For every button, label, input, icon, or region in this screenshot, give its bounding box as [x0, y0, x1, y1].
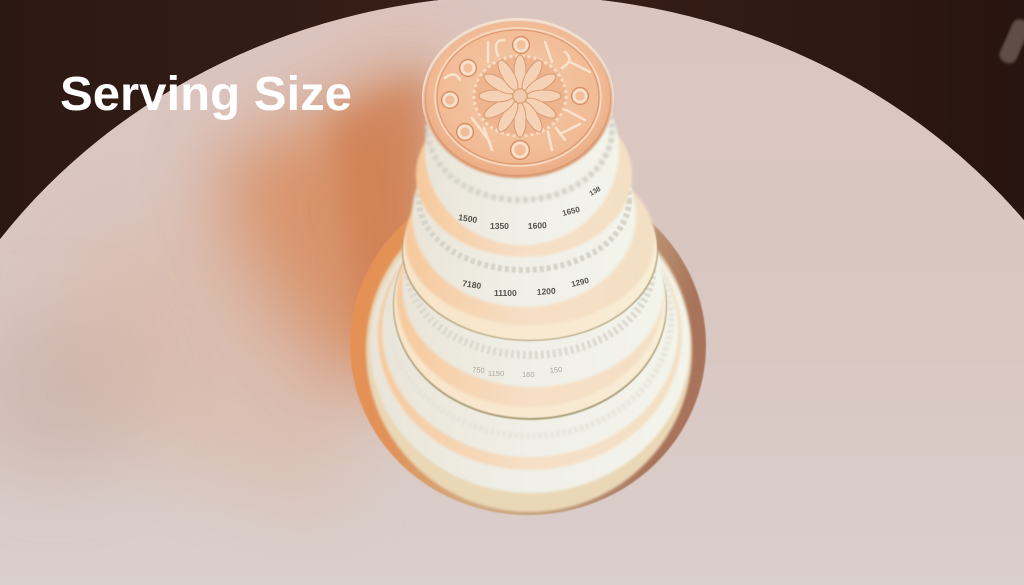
cake plate	[350, 175, 706, 515]
cake year labels: 750	[472, 365, 485, 375]
cake year labels: 11100	[494, 288, 517, 298]
cake year labels: 160	[522, 370, 535, 379]
cake year labels: 138	[588, 186, 602, 198]
cake	[350, 18, 706, 515]
cake year labels: 1150	[488, 369, 504, 378]
scroll ring	[444, 39, 590, 157]
table shadow	[74, 212, 353, 510]
cake year labels: 1650	[561, 205, 581, 218]
cake year labels: 7180	[462, 278, 482, 291]
cake year labels: 1290	[570, 276, 590, 289]
cake year labels: 150	[549, 365, 563, 375]
cake year labels: 1500	[458, 212, 478, 225]
title: Serving Size	[60, 68, 352, 121]
tier 5	[366, 188, 692, 512]
cake year labels: 1600	[528, 220, 547, 231]
tier 2	[416, 55, 632, 257]
cake year labels: 1200	[536, 286, 556, 297]
embossed medallion top	[422, 18, 614, 178]
rosette petals	[479, 55, 561, 137]
chair glint	[997, 17, 1024, 66]
tier 4	[393, 185, 667, 420]
tier 3	[402, 123, 658, 341]
cake year labels	[458, 186, 602, 379]
dotted ring	[474, 56, 566, 136]
cake year labels: 1350	[490, 221, 509, 231]
